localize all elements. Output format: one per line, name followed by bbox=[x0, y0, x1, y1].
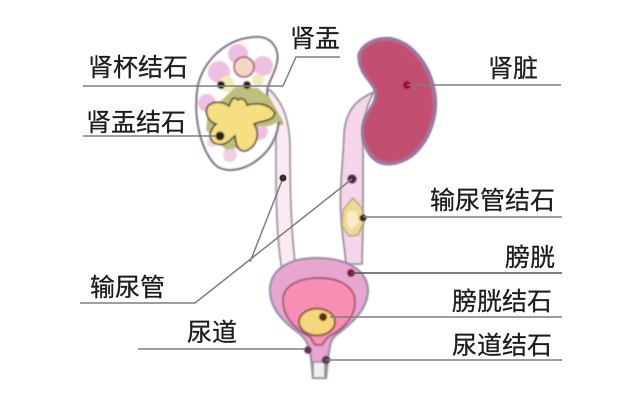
calyces and pelvis bbox=[206, 57, 282, 151]
bladder bbox=[270, 258, 368, 378]
label: urethral stone: 尿道结石 bbox=[452, 332, 552, 360]
label: ureteral stone: 输尿管结石 bbox=[430, 187, 555, 215]
label: renal pelvis: 肾盂 bbox=[290, 25, 340, 53]
label: renal calyx stone: 肾杯结石 bbox=[88, 54, 188, 82]
label: urethra: 尿道 bbox=[187, 319, 237, 347]
label: ureter: 输尿管 bbox=[90, 274, 165, 302]
label: bladder: 膀胱 bbox=[505, 244, 555, 272]
right ureter bbox=[340, 92, 374, 264]
left ureter bbox=[262, 90, 296, 270]
left kidney bbox=[196, 37, 282, 170]
kidney stones bbox=[216, 81, 251, 140]
bladder stone bbox=[299, 308, 335, 336]
label: kidney: 肾脏 bbox=[488, 55, 538, 83]
leader lines bbox=[80, 57, 562, 360]
label: bladder stone: 膀胱结石 bbox=[452, 288, 552, 316]
label: renal pelvis stone: 肾盂结石 bbox=[86, 109, 186, 137]
ureter stone bbox=[342, 174, 366, 236]
ureter marker bbox=[280, 174, 286, 182]
urethral stones bbox=[304, 346, 330, 364]
right kidney bbox=[358, 38, 436, 165]
